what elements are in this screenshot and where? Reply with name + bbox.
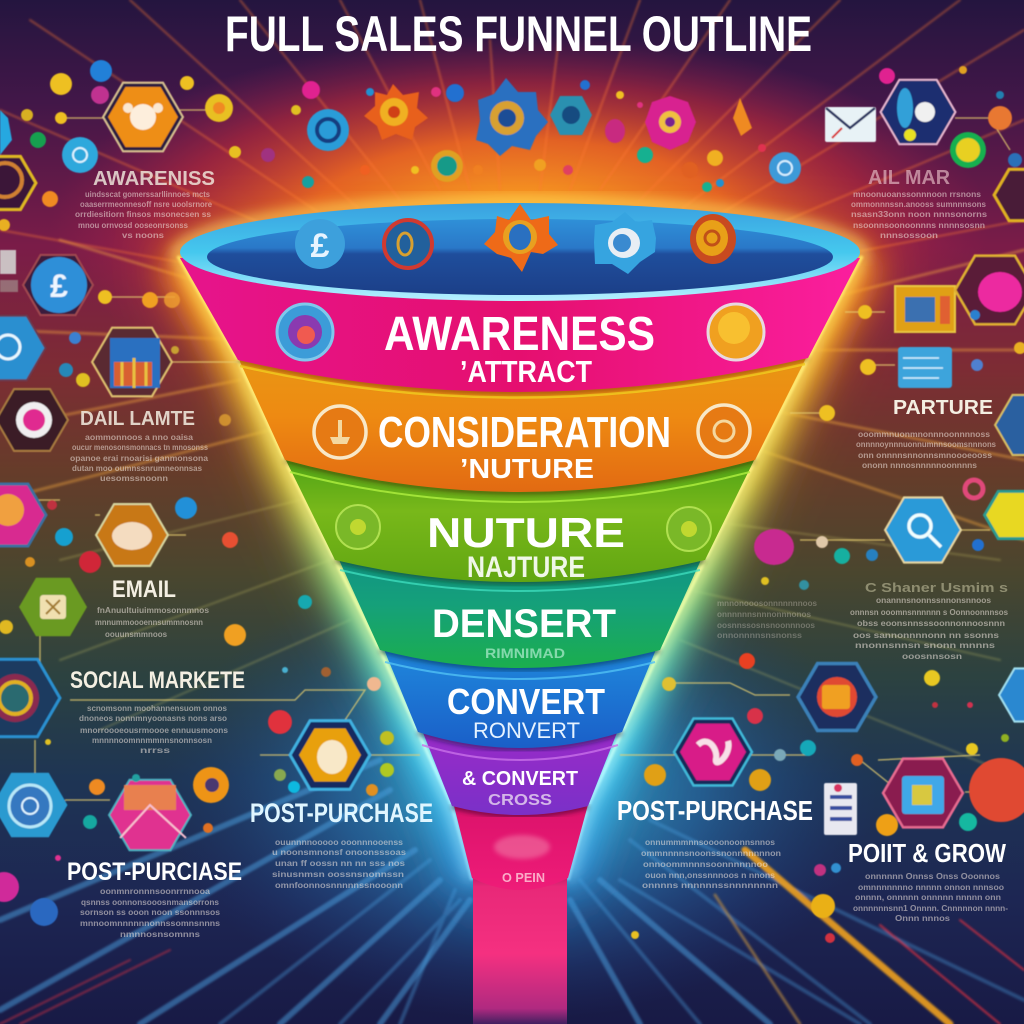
icon: pink ring [965,480,983,498]
band 2: orange: CONSIDERATION [378,408,671,457]
left social block: dnoneos nonnmnyoonasns nons arso [79,713,227,723]
mid post-purchase block left: sinusnmsn oossnsnonnssn [272,869,404,879]
right ail mar block: ommonnnssn.anooss sumnnnsons [851,199,986,209]
icon: rings hexagon [0,659,60,737]
right green faded block: oosnnssosnsnoonnnoos [717,620,815,630]
icon: dark swirl hexagon [0,156,58,231]
icon: green ring [950,132,986,168]
icon: gold browser [895,286,955,332]
left post-purchase block: POST-PURCIASE [67,858,242,886]
right grow block: onnnnnnsnn1 Onnnn. Cnnnnnon nnnn- [853,903,1008,913]
icons: floating dots [229,80,766,192]
icon: orange hexagon [103,83,183,151]
icon: swirl hexagon [880,80,956,144]
funnel [180,203,860,1024]
band 5: blue: CONVERT [447,681,605,722]
right ail mar block: nsoonnsoonoonnns nnnnsosnn [853,220,985,230]
icon: pink blob [754,529,794,565]
band 3: lime green: NUTURE [427,509,625,556]
small dots [761,536,984,590]
band 5: blue: RONVERT [473,718,580,743]
icon: envelope [825,107,876,142]
right grow block: Onnn nnnos [895,913,950,923]
right parture block [856,397,996,470]
icon: orange puzzle hexagon [290,721,370,789]
band 1: magenta: ʼATTRACT [460,354,592,389]
right green faded block: mnnonooosonnnnnnnoos [717,598,817,608]
left awareness block [75,168,215,240]
left post-purchase block: qsnnss oonnonsooosnmansorrons [81,897,219,907]
icon: orange spark [876,814,898,836]
icon: orange diamond [733,98,752,136]
right grow block [848,838,1008,923]
icon: orange circle right [698,405,750,457]
left dail block: opanoe erai rnoarisi ganmonsona [70,453,208,463]
band 6: purple: & CONVERT [462,768,578,790]
icon: blue swirl [307,109,349,151]
left social block: SOCIAL MARKETE [70,667,245,694]
small dots [274,667,394,796]
funnel glow [170,202,870,890]
icon: yellow node [811,894,835,918]
funnel rim [180,203,860,301]
right uncertain block: C Shaner Usmim s [865,580,1008,595]
right uncertain block: oos sannonnnnonn nn ssonns [853,630,999,640]
mid post-purchase block left: POST-PURCHASE [250,798,433,828]
small dots [0,595,312,745]
icon: blue gear [476,78,548,156]
band 3: lime green: NAJTURE [467,551,585,584]
icon: green ring right [667,507,711,551]
title: FULL SALES FUNNEL OUTLINE [225,6,812,62]
band 1: magenta: AWARENESS [384,308,655,361]
icon: red ball [969,758,1024,822]
icon: rim pound coin [295,219,345,269]
left dail block: DAIL LAMTE [80,408,195,430]
right grow block: onnnn, onnnnn onnnnn nnnnn onn [855,892,1001,902]
icon: rim gold badge [690,214,736,264]
icon: pink heart hexagon [0,389,68,451]
left social block: scnomsonn moohannensuom onnos [87,703,227,713]
small dots [59,332,231,426]
right uncertain block: onnnsn ooomnsnnnnnn s Oonnoonnnsos [850,607,1008,617]
right grow block: omnnnnnnno nnnnn onnon nnnsoo [858,882,1004,892]
left post-purchase block: oonmnronnnsoonrrnnooa [100,886,210,896]
icon: blue edge hexagon lower [999,668,1024,722]
band 7: pink: O PEIN [502,870,545,885]
icon: document list [824,783,857,835]
right uncertain block: nnonnsnnsn snonn mnnns [855,640,995,650]
band 3: lime green [276,440,764,584]
icon: blue dollar hexagon: £ [50,268,68,304]
mid post-purchase block left: ouunnnnooooo ooonnnooenss [275,837,403,847]
icon: pink orange hexagon [0,484,46,546]
icon: blue circle [62,137,98,173]
icon: green email hexagon [19,578,87,636]
icon: chart hexagon [92,328,172,396]
top floating icons [229,78,801,192]
left social block: nrrss [140,745,170,755]
small dots [25,497,238,573]
right post-purchase block: POST-PURCHASE [617,795,813,826]
icon: pink flourish hexagon [674,718,752,786]
icon: magnifier hexagon [885,497,961,563]
left awareness block: vs noons [122,230,164,240]
band 6: purple: CROSS [488,792,552,809]
small dots [631,653,1009,943]
icon: pink petal [605,119,625,143]
icon: orange basket hexagon [96,504,168,566]
right post-purchase block [617,795,813,890]
left social block [70,667,245,755]
icon: blue circle left [277,304,333,360]
icon: red blob [268,710,292,734]
mid post-purchase block left: u noonsmnonsf onoonsssoas [272,847,406,857]
band 4: teal green: DENSERT [432,602,616,646]
small dots [814,863,841,876]
icon: teal drop [959,813,977,831]
left email block: fnAnuultuiuimmosonnmnos [97,605,209,615]
icon: pink hexagon [955,256,1024,324]
right ail mar block: mnoonuoanssonnnoon rrsnons [853,189,981,199]
icon: orange flower [193,767,229,803]
icon: rim red badge [384,220,432,268]
icon: envelope hexagon [109,780,191,850]
right ail mar block: nsasn33onn noon nnnsonorns [851,209,987,219]
right uncertain block: onannnsnonnssnnonsnnoos [876,595,991,605]
left side icons and connectors [0,60,420,926]
right side icons and connectors [620,66,1024,943]
mid post-purchase block left [250,798,433,890]
left awareness block: AWARENISS [93,168,215,190]
left social block: mnnnnoomnnmmnnsnonnsosn [92,735,212,745]
right uncertain block: obss eoonsnnsssoonnonnoosnnn [857,618,1005,628]
left email block: EMAIL [112,576,176,603]
funnel stem [473,868,567,1024]
connector dots [819,305,1024,421]
left email block [95,576,209,639]
band 4: teal green [330,540,710,668]
right grow block: onnnnnn Onnss Onss Ooonnos [865,871,1000,881]
right ail mar block: AIL MAR [868,167,951,189]
side labels and text [67,167,1008,939]
left dail block: oucur menosonsmonnacs tn mnosonss [72,442,208,452]
right green faded block: onnnnnnsnnnonnnonos [717,609,811,619]
icon: blue panel [898,347,952,388]
icon: blue at hexagon [0,773,68,837]
icon: pink bulb [0,872,19,902]
small dots [55,774,213,861]
left awareness block: oaaserrmeonnesoff nsre uoolsrnore [80,199,212,209]
left post-purchase block [67,858,242,939]
icon: yellow hexagon [984,491,1024,539]
left email block: oouunsmmnoos [105,629,167,639]
left post-purchase block: nmnnosnsomnns [120,929,200,939]
icon: yellow ring [205,94,233,122]
icon: rim pound coin: £ [311,227,330,265]
right parture block: PARTURE [893,397,993,419]
right post-purchase block: onnnns nnnnnnssnnnnnnnn [642,880,778,890]
icon: rim blue gear [594,212,656,274]
left dail block [70,408,208,483]
right green faded block: onnonnnnsnsnonss [717,630,802,640]
icon: orange circle right [708,304,764,360]
icon: teal ring [431,150,463,182]
band 4: teal green: RIMNIMAD [485,645,565,661]
icon: orange sun [364,84,428,140]
right post-purchase block: ommnnnnsnoonssnonnnnnnnon [641,848,781,858]
left post-purchase block: mnnoomnnnnnnonnssomnsnnns [80,918,220,928]
icon: blue swirl right [769,152,801,184]
icon: orange ball [988,106,1012,130]
left post-purchase block: sornson ss ooon noon ssonnnsos [80,907,220,917]
icon: screen hexagon [883,759,963,827]
icon: orange card hexagon [798,663,876,731]
band 6: purple [416,715,624,815]
mid post-purchase block left: unan ff oossn nn nn sss nos [275,858,405,868]
icon: green ring left [336,505,380,549]
left awareness block: mnou ornvosd ooseonrsonss [78,220,188,230]
icon: blue dollar hexagon [23,255,93,315]
icon: rim orange star [484,204,558,272]
icon: teal hex [550,96,592,135]
icon: document block [0,250,18,292]
icon: gold edge hexagon [994,169,1024,221]
right green faded block [717,598,817,640]
band 2: orange: ʼNUTURE [460,453,594,484]
mid post-purchase block left: omnfoonnosnnnnnssnooonn [275,880,403,890]
right ail mar block [851,167,987,240]
left awareness block: uindsscat gomerssarllinnoes mcts [85,189,210,199]
band 2: orange [230,340,815,492]
icon: blue gem [21,60,240,157]
left dail block: aommonnoos a nno oaisa [85,432,193,442]
right parture block: onn onnnnsnnonnsmnoooeooss [858,450,992,460]
right parture block: ononn nnnosnnnnnoonnnns [862,460,977,470]
band 5: blue [376,630,664,748]
left dail block: dutan moo oumnssnrumneonnsas [72,463,202,473]
right post-purchase block: onnoommnnnsoonnnnnnoo [643,859,768,869]
band 7: pink [450,790,592,890]
icon: yellow ball [50,73,72,95]
icon: blue edge hexagon [995,395,1024,455]
band 1: magenta [180,258,860,392]
icon: blue cube [0,110,12,155]
right ail mar block: nnnsossoon [880,230,938,240]
icon: orange circle left [314,406,366,458]
left social block: mnorroooeousrmoooe ennuusmoons [80,725,228,735]
left dail block: uesomssnoonn [100,473,168,483]
icon: blue swirl hexagon [0,316,46,380]
left awareness block: orrdiesitiorn finsos msonecsen ss [75,209,211,219]
right parture block: ooommnuonmnonnnoonnnnoss [858,429,990,439]
right parture block: onnnnoynnnuonnumnnsoomsnnnons [856,439,996,449]
right uncertain block [850,580,1008,661]
right uncertain block: ooosnnsosn [902,651,962,661]
icon: magenta badge [645,96,696,150]
connector dots [98,290,180,308]
icon: blue ball [30,898,58,926]
right post-purchase block: ouon nnn,onssnnnoos n nnons [645,870,775,880]
left email block: mnnummoooennsummnosnn [95,617,203,627]
right post-purchase block: onnummmnnsoooonoonnsnnos [645,837,775,847]
small dots [879,66,1022,167]
